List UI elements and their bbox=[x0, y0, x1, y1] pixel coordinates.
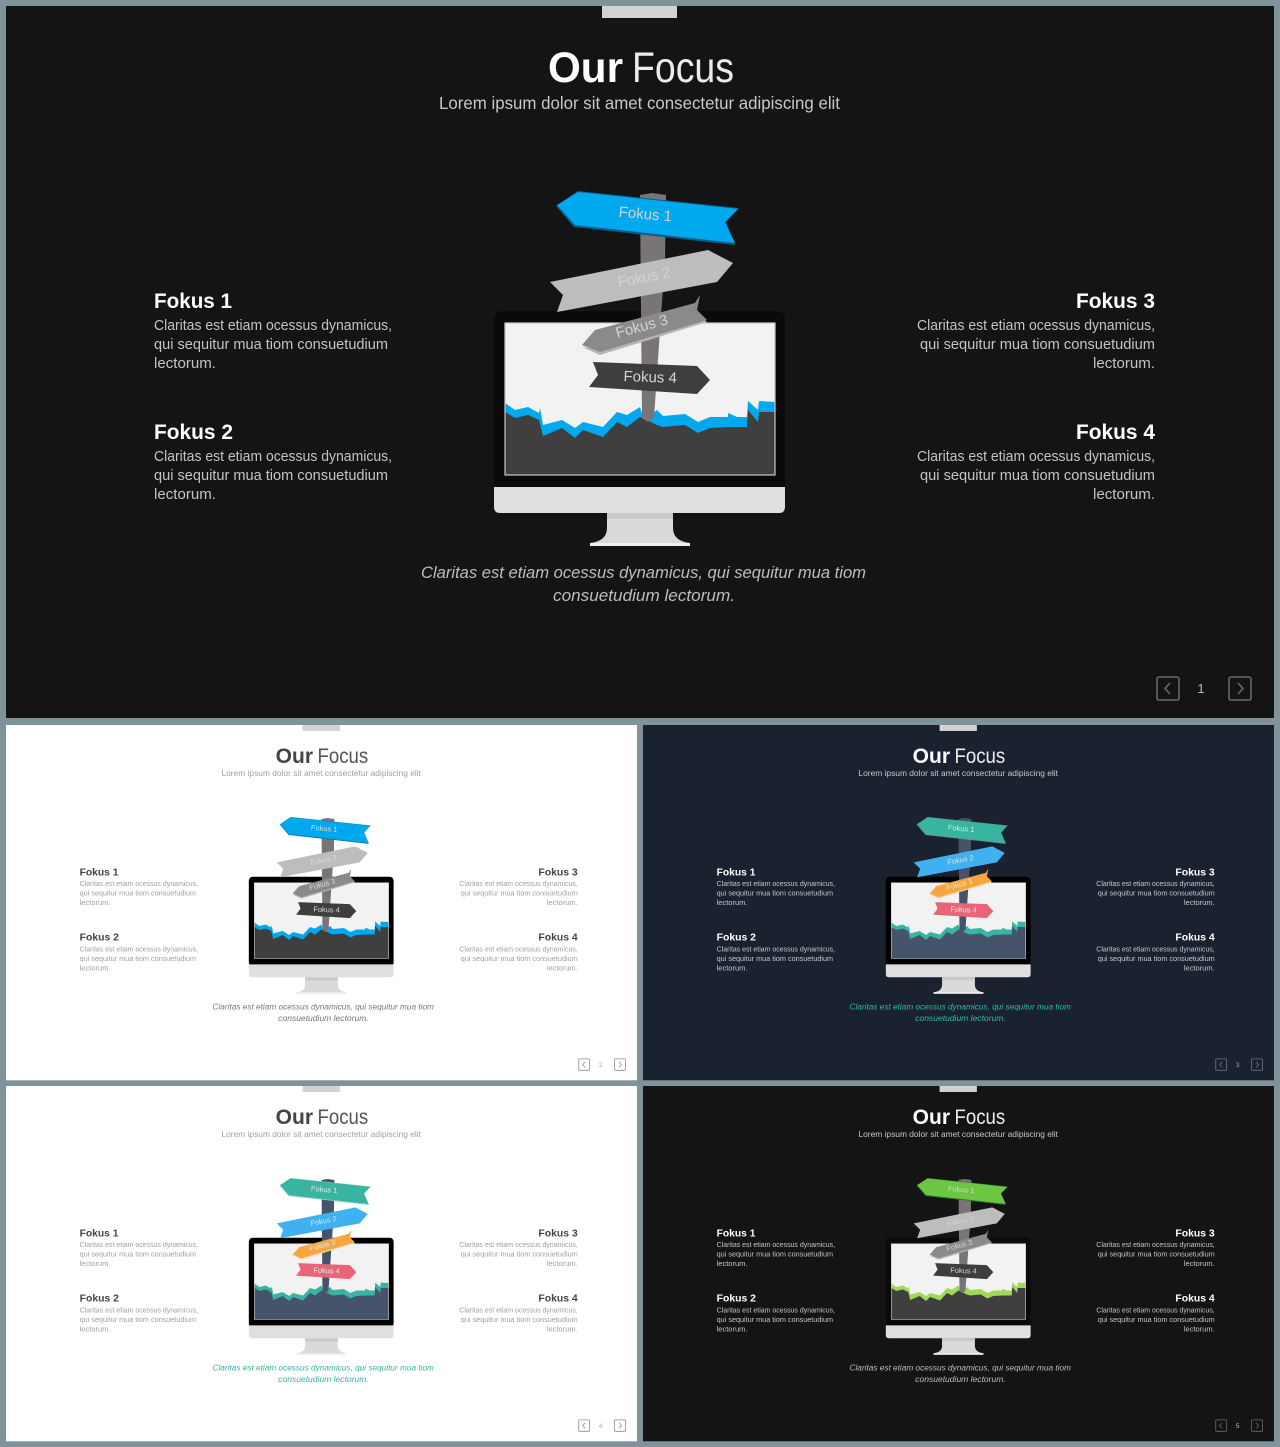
text block: Fokus 1: qui sequitur mua tiom consuetudium bbox=[80, 1250, 196, 1259]
text block: Fokus 3: qui sequitur mua tiom consuetudium bbox=[1098, 889, 1215, 898]
icon: monitor with signpost: Fokus 1 bbox=[948, 823, 975, 834]
text block: Fokus 2 bbox=[717, 932, 835, 972]
text block: Fokus 4: Claritas est etiam ocessus dynamicus, bbox=[1096, 1305, 1215, 1314]
caption: consuetudium lectorum. bbox=[278, 1013, 369, 1023]
text block: Fokus 3: lectorum. bbox=[1184, 898, 1215, 907]
text block: Fokus 4: lectorum. bbox=[547, 963, 578, 972]
text block: Fokus 3: Fokus 3 bbox=[1076, 290, 1155, 313]
text block: Fokus 1: lectorum. bbox=[80, 898, 110, 907]
navigation: 5 bbox=[1236, 1423, 1240, 1430]
text block: Fokus 1: lectorum. bbox=[717, 898, 747, 907]
text block: Fokus 4 bbox=[459, 932, 578, 972]
text block: Fokus 1: qui sequitur mua tiom consuetudium bbox=[717, 1250, 833, 1259]
text block: Fokus 4: lectorum. bbox=[1093, 487, 1155, 503]
text block: Fokus 1: qui sequitur mua tiom consuetudium bbox=[717, 889, 833, 898]
text block: Fokus 4: qui sequitur mua tiom consuetudium bbox=[461, 1315, 578, 1324]
text block: Fokus 2: qui sequitur mua tiom consuetudium bbox=[717, 954, 833, 963]
text block: Fokus 1 bbox=[154, 290, 392, 372]
text block: Fokus 3 bbox=[459, 867, 578, 907]
text block: Fokus 4: Claritas est etiam ocessus dynamicus, bbox=[1096, 944, 1215, 953]
text block: Fokus 1 bbox=[717, 1228, 835, 1268]
text block: Fokus 3: qui sequitur mua tiom consuetudium bbox=[1098, 1250, 1215, 1259]
text block: Fokus 2: Claritas est etiam ocessus dynamicus, bbox=[154, 449, 392, 465]
title: Our bbox=[548, 44, 623, 92]
text block: Fokus 3: Fokus 3 bbox=[538, 867, 578, 878]
title: Focus bbox=[954, 744, 1005, 768]
title: Our bbox=[276, 1105, 313, 1129]
panel: slide 3 navy bbox=[643, 725, 1274, 1080]
caption: Claritas est etiam ocessus dynamicus, qui sequitur mua tiom bbox=[212, 1363, 434, 1373]
text block: Fokus 3: lectorum. bbox=[547, 1259, 578, 1268]
text block: Fokus 4: lectorum. bbox=[1184, 963, 1215, 972]
text block: Fokus 4 bbox=[459, 1293, 578, 1333]
navigation: 4 bbox=[599, 1423, 603, 1430]
icon: monitor with signpost: Fokus 1 bbox=[311, 823, 338, 834]
text block: Fokus 2: qui sequitur mua tiom consuetudium bbox=[717, 1315, 833, 1324]
text block: Fokus 4 bbox=[917, 421, 1155, 503]
icon: monitor with signpost bbox=[886, 1178, 1031, 1355]
navigation: 1 bbox=[1197, 681, 1205, 696]
text block: Fokus 3: Claritas est etiam ocessus dynamicus, bbox=[459, 1240, 578, 1249]
text block: Fokus 3 bbox=[1096, 1228, 1215, 1268]
icon: monitor with signpost: Fokus 3 bbox=[945, 1238, 973, 1253]
icon: monitor with signpost: Fokus 4 bbox=[623, 368, 677, 387]
icon: monitor with signpost bbox=[494, 191, 785, 546]
text block: Fokus 4: qui sequitur mua tiom consuetudium bbox=[1098, 954, 1215, 963]
icon: monitor with signpost: Fokus 3 bbox=[945, 877, 973, 892]
navigation bbox=[579, 1420, 626, 1431]
caption: Claritas est etiam ocessus dynamicus, qui sequitur mua tiom bbox=[849, 1002, 1071, 1012]
caption: consuetudium lectorum. bbox=[278, 1374, 369, 1384]
text block: Fokus 2: Claritas est etiam ocessus dynamicus, bbox=[717, 944, 835, 953]
caption bbox=[421, 563, 866, 605]
text block: Fokus 3 bbox=[917, 290, 1155, 372]
icon: monitor with signpost: Fokus 1 bbox=[311, 1184, 338, 1195]
text block: Fokus 1: qui sequitur mua tiom consuetudium bbox=[80, 889, 196, 898]
text block: Fokus 3: Claritas est etiam ocessus dynamicus, bbox=[1096, 879, 1215, 888]
text block: Fokus 1: Fokus 1 bbox=[80, 867, 119, 878]
icon: monitor with signpost: Fokus 3 bbox=[614, 312, 670, 342]
text block: Fokus 4: lectorum. bbox=[1184, 1324, 1215, 1333]
text block: Fokus 4: qui sequitur mua tiom consuetudium bbox=[461, 954, 578, 963]
text block: Fokus 3: Fokus 3 bbox=[1175, 1228, 1215, 1239]
text block: Fokus 1: Fokus 1 bbox=[154, 290, 232, 313]
title: Focus bbox=[317, 744, 368, 768]
text block: Fokus 1: lectorum. bbox=[717, 1259, 747, 1268]
text block: Fokus 1 bbox=[80, 867, 198, 907]
caption: Claritas est etiam ocessus dynamicus, qui sequitur mua tiom bbox=[849, 1363, 1071, 1373]
text block: Fokus 4: Fokus 4 bbox=[538, 932, 578, 943]
navigation bbox=[579, 1059, 626, 1070]
text block: Fokus 1: Fokus 1 bbox=[717, 1228, 756, 1239]
text block: Fokus 3: lectorum. bbox=[547, 898, 578, 907]
text block: Fokus 1: qui sequitur mua tiom consuetudium bbox=[154, 337, 388, 353]
navigation bbox=[1216, 1420, 1263, 1431]
text block: Fokus 2: lectorum. bbox=[717, 1324, 747, 1333]
text block: Fokus 3: Fokus 3 bbox=[538, 1228, 578, 1239]
text block: Fokus 2: Claritas est etiam ocessus dynamicus, bbox=[80, 944, 198, 953]
icon: monitor with signpost: Fokus 2 bbox=[310, 1214, 337, 1228]
icon: monitor with signpost: Fokus 1 bbox=[618, 204, 673, 225]
caption: Claritas est etiam ocessus dynamicus, qui sequitur mua tiom bbox=[212, 1002, 434, 1012]
text block: Fokus 2: lectorum. bbox=[154, 487, 216, 503]
text block: Fokus 1: Claritas est etiam ocessus dynamicus, bbox=[154, 318, 392, 334]
text block: Fokus 4: qui sequitur mua tiom consuetudium bbox=[920, 468, 1155, 484]
text block: Fokus 4: Claritas est etiam ocessus dynamicus, bbox=[917, 449, 1155, 465]
icon: monitor with signpost: Fokus 4 bbox=[313, 1266, 340, 1276]
text block: Fokus 1 bbox=[717, 867, 835, 907]
text block: Fokus 3: qui sequitur mua tiom consuetudium bbox=[461, 1250, 578, 1259]
text block: Fokus 2 bbox=[154, 421, 392, 503]
caption: consuetudium lectorum. bbox=[915, 1374, 1006, 1384]
text block: Fokus 1: Fokus 1 bbox=[717, 867, 756, 878]
icon: monitor with signpost: Fokus 1 bbox=[948, 1184, 975, 1195]
panel: slide 5 dark green bbox=[643, 1086, 1274, 1441]
text block: Fokus 2: lectorum. bbox=[80, 963, 110, 972]
caption: Claritas est etiam ocessus dynamicus, qui sequitur mua tiom bbox=[421, 563, 866, 582]
caption: consuetudium lectorum. bbox=[915, 1013, 1006, 1023]
navigation: 3 bbox=[1236, 1062, 1240, 1069]
icon: monitor with signpost: Fokus 2 bbox=[947, 1214, 974, 1228]
text block: Fokus 2 bbox=[80, 932, 198, 972]
text block: Fokus 3: qui sequitur mua tiom consuetudium bbox=[920, 337, 1155, 353]
text block: Fokus 3 bbox=[1096, 867, 1215, 907]
icon: monitor with signpost: Fokus 4 bbox=[950, 1266, 977, 1276]
text block: Fokus 2 bbox=[80, 1293, 198, 1333]
text block: Fokus 3: Claritas est etiam ocessus dynamicus, bbox=[917, 318, 1155, 334]
subtitle: Lorem ipsum dolor sit amet consectetur adipiscing elit bbox=[858, 1129, 1059, 1139]
caption bbox=[212, 1002, 434, 1023]
text block: Fokus 2 bbox=[717, 1293, 835, 1333]
text block: Fokus 1 bbox=[80, 1228, 198, 1268]
text block: Fokus 3: lectorum. bbox=[1184, 1259, 1215, 1268]
text block: Fokus 3: Claritas est etiam ocessus dynamicus, bbox=[1096, 1240, 1215, 1249]
caption bbox=[849, 1363, 1071, 1384]
caption: consuetudium lectorum. bbox=[553, 586, 735, 605]
subtitle: Lorem ipsum dolor sit amet consectetur adipiscing elit bbox=[221, 768, 422, 778]
caption bbox=[849, 1002, 1071, 1023]
icon: monitor with signpost bbox=[249, 1178, 394, 1355]
navigation: 2 bbox=[599, 1062, 603, 1069]
text block: Fokus 2: Fokus 2 bbox=[154, 421, 233, 444]
text block: Fokus 4: Fokus 4 bbox=[1076, 421, 1155, 444]
text block: Fokus 3 bbox=[459, 1228, 578, 1268]
text block: Fokus 4: Fokus 4 bbox=[538, 1293, 578, 1304]
text block: Fokus 1: lectorum. bbox=[154, 356, 216, 372]
text block: Fokus 2: qui sequitur mua tiom consuetudium bbox=[80, 1315, 196, 1324]
text block: Fokus 1: Fokus 1 bbox=[80, 1228, 119, 1239]
text block: Fokus 4 bbox=[1096, 932, 1215, 972]
caption bbox=[212, 1363, 434, 1384]
title: Focus bbox=[317, 1105, 368, 1129]
navigation bbox=[1216, 1059, 1263, 1070]
title: Our bbox=[913, 744, 950, 768]
text block: Fokus 2: Fokus 2 bbox=[717, 932, 756, 943]
icon: monitor with signpost: Fokus 3 bbox=[308, 877, 336, 892]
text block: Fokus 2: Fokus 2 bbox=[80, 1293, 119, 1304]
icon: monitor with signpost: Fokus 4 bbox=[950, 905, 977, 915]
icon: monitor with signpost: Fokus 2 bbox=[616, 264, 672, 291]
icon: monitor with signpost: Fokus 2 bbox=[947, 853, 974, 867]
panel: slide 4 white teal bbox=[6, 1086, 637, 1441]
icon: monitor with signpost bbox=[249, 817, 394, 994]
text block: Fokus 4: qui sequitur mua tiom consuetudium bbox=[1098, 1315, 1215, 1324]
panel: slide 1 dark large bbox=[6, 6, 1274, 718]
title: Our bbox=[913, 1105, 950, 1129]
icon: monitor with signpost: Fokus 3 bbox=[308, 1238, 336, 1253]
icon: monitor with signpost: Fokus 2 bbox=[310, 853, 337, 867]
text block: Fokus 4: Fokus 4 bbox=[1175, 1293, 1215, 1304]
title: Focus bbox=[954, 1105, 1005, 1129]
text block: Fokus 2: lectorum. bbox=[717, 963, 747, 972]
title: Our bbox=[276, 744, 313, 768]
title: Focus bbox=[632, 44, 734, 92]
navigation bbox=[1157, 677, 1251, 700]
text block: Fokus 2: qui sequitur mua tiom consuetudium bbox=[154, 468, 388, 484]
icon: monitor with signpost: Fokus 4 bbox=[313, 905, 340, 915]
text block: Fokus 3: lectorum. bbox=[1093, 356, 1155, 372]
text block: Fokus 1: Claritas est etiam ocessus dynamicus, bbox=[80, 879, 198, 888]
panel: slide 2 white bbox=[6, 725, 637, 1080]
text block: Fokus 4: lectorum. bbox=[547, 1324, 578, 1333]
text block: Fokus 2: Claritas est etiam ocessus dynamicus, bbox=[717, 1305, 835, 1314]
text block: Fokus 2: Fokus 2 bbox=[717, 1293, 756, 1304]
text block: Fokus 1: Claritas est etiam ocessus dynamicus, bbox=[717, 1240, 835, 1249]
subtitle: Lorem ipsum dolor sit amet consectetur adipiscing elit bbox=[221, 1129, 422, 1139]
text block: Fokus 3: qui sequitur mua tiom consuetudium bbox=[461, 889, 578, 898]
text block: Fokus 4: Fokus 4 bbox=[1175, 932, 1215, 943]
text block: Fokus 3: Claritas est etiam ocessus dynamicus, bbox=[459, 879, 578, 888]
icon: monitor with signpost bbox=[886, 817, 1031, 994]
text block: Fokus 2: qui sequitur mua tiom consuetudium bbox=[80, 954, 196, 963]
text block: Fokus 1: Claritas est etiam ocessus dynamicus, bbox=[717, 879, 835, 888]
subtitle: Lorem ipsum dolor sit amet consectetur adipiscing elit bbox=[858, 768, 1059, 778]
text block: Fokus 2: Claritas est etiam ocessus dynamicus, bbox=[80, 1305, 198, 1314]
subtitle: Lorem ipsum dolor sit amet consectetur adipiscing elit bbox=[439, 93, 840, 113]
text block: Fokus 3: Fokus 3 bbox=[1175, 867, 1215, 878]
text block: Fokus 1: Claritas est etiam ocessus dynamicus, bbox=[80, 1240, 198, 1249]
text block: Fokus 2: Fokus 2 bbox=[80, 932, 119, 943]
text block: Fokus 2: lectorum. bbox=[80, 1324, 110, 1333]
text block: Fokus 4: Claritas est etiam ocessus dynamicus, bbox=[459, 1305, 578, 1314]
text block: Fokus 4 bbox=[1096, 1293, 1215, 1333]
text block: Fokus 1: lectorum. bbox=[80, 1259, 110, 1268]
text block: Fokus 4: Claritas est etiam ocessus dynamicus, bbox=[459, 944, 578, 953]
